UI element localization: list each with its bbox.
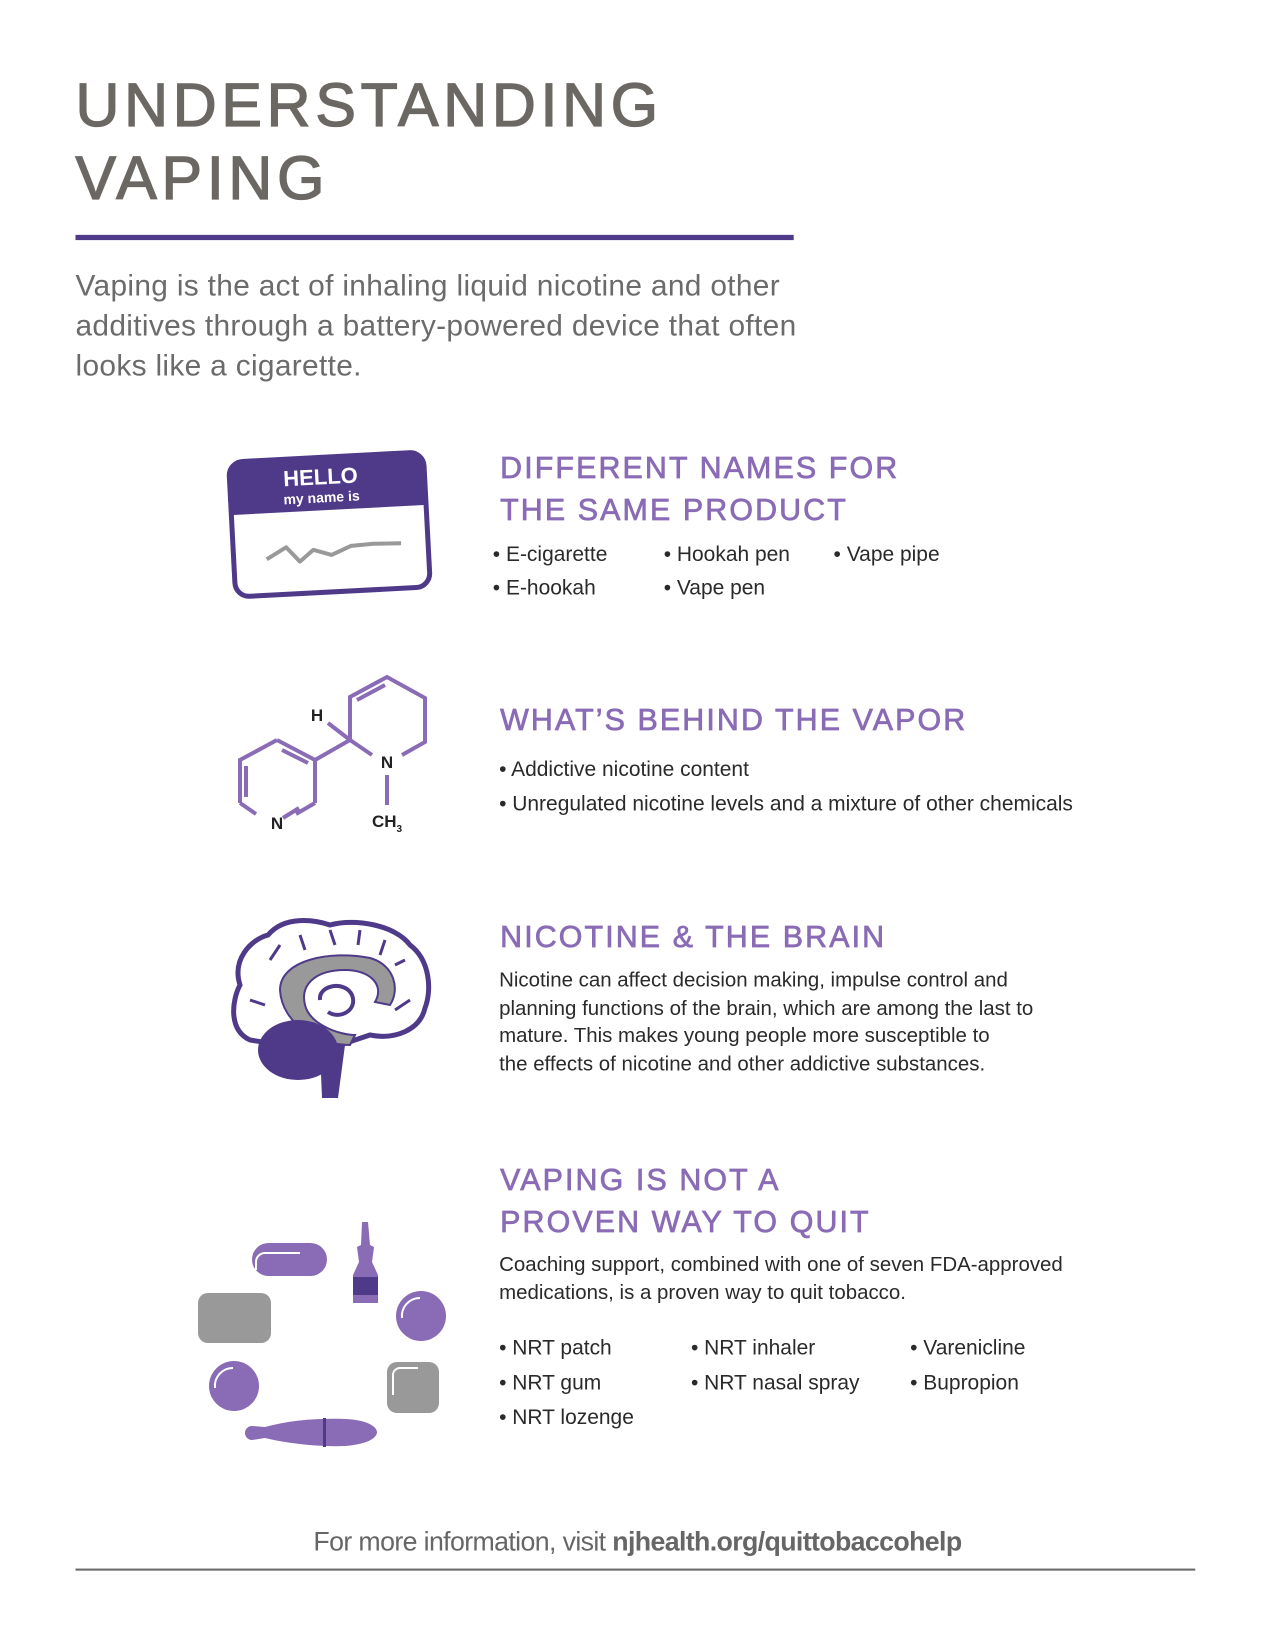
intro text (75, 269, 796, 383)
list: vapor contents: • Unregulated nicotine levels and a mixture of other chemicals (499, 793, 1073, 816)
icon: name tag: my name is (283, 487, 360, 507)
list: vapor contents (499, 758, 1073, 816)
title rule (75, 235, 794, 240)
icon: nicotine molecule: H (311, 706, 323, 725)
icon: nicotine molecule (240, 677, 425, 835)
list: medications: • Varenicline (910, 1337, 1025, 1360)
title: UNDERSTANDING (75, 71, 663, 139)
paragraph: brain: mature. This makes young people more susceptible to (499, 1024, 990, 1047)
list: medications: • NRT gum (499, 1371, 601, 1395)
list: names: • Vape pen (664, 577, 765, 600)
list: medications: • NRT patch (499, 1337, 612, 1360)
paragraph: coaching: Coaching support, combined with one of seven FDA-approved (499, 1253, 1063, 1276)
list: medications: • NRT nasal spray (691, 1371, 860, 1395)
icon: nicotine molecule: N (271, 814, 283, 833)
list: vapor contents: • Addictive nicotine content (499, 758, 749, 781)
paragraph: brain: planning functions of the brain, which are among the last to (499, 997, 1033, 1020)
list: medications (499, 1337, 1025, 1429)
list: medications: • Bupropion (910, 1371, 1019, 1395)
icon: brain (234, 921, 429, 1098)
list: medications: • NRT lozenge (499, 1406, 634, 1429)
icon: nicotine molecule: 3 (396, 824, 402, 835)
heading: different names (500, 452, 899, 527)
heading: different names: DIFFERENT NAMES FOR (500, 452, 899, 485)
icon: nicotine molecule: CH (372, 812, 396, 831)
icon: name tag (229, 452, 430, 597)
icon: name tag: HELLO (283, 462, 358, 491)
title: VAPING (75, 145, 329, 213)
heading: not a proven way (500, 1164, 871, 1239)
heading: nicotine brain: NICOTINE & THE BRAIN (500, 921, 886, 954)
list: medications: • NRT inhaler (691, 1337, 815, 1360)
paragraph: coaching: medications, is a proven way to quit tobacco. (499, 1281, 906, 1304)
heading: different names: THE SAME PRODUCT (500, 494, 848, 527)
list: names: • Hookah pen (664, 543, 790, 566)
footer rule (75, 1569, 1195, 1571)
paragraph: coaching (499, 1253, 1063, 1304)
icon: quit medications (198, 1222, 446, 1447)
paragraph: brain: the effects of nicotine and other addictive substances. (499, 1052, 985, 1075)
title (74, 71, 663, 213)
intro text: Vaping is the act of inhaling liquid nicotine and other (75, 269, 780, 303)
intro text: looks like a cigarette. (75, 349, 362, 383)
icon: nicotine molecule: N (381, 753, 393, 772)
heading: not a proven way: VAPING IS NOT A (500, 1164, 781, 1197)
list: names (493, 543, 940, 600)
list: names: • Vape pipe (834, 543, 940, 566)
list: names: • E-cigarette (493, 543, 607, 566)
footer: For more information, visit njhealth.org/quittobaccohelp (313, 1528, 962, 1557)
intro text: additives through a battery-powered device that often (75, 309, 796, 343)
paragraph: brain: Nicotine can affect decision making, impulse control and (499, 969, 1008, 992)
heading: not a proven way: PROVEN WAY TO QUIT (500, 1206, 871, 1239)
paragraph: brain (499, 969, 1033, 1075)
heading: behind the vapor: WHAT’S BEHIND THE VAPOR (500, 704, 967, 737)
list: names: • E-hookah (493, 577, 596, 600)
